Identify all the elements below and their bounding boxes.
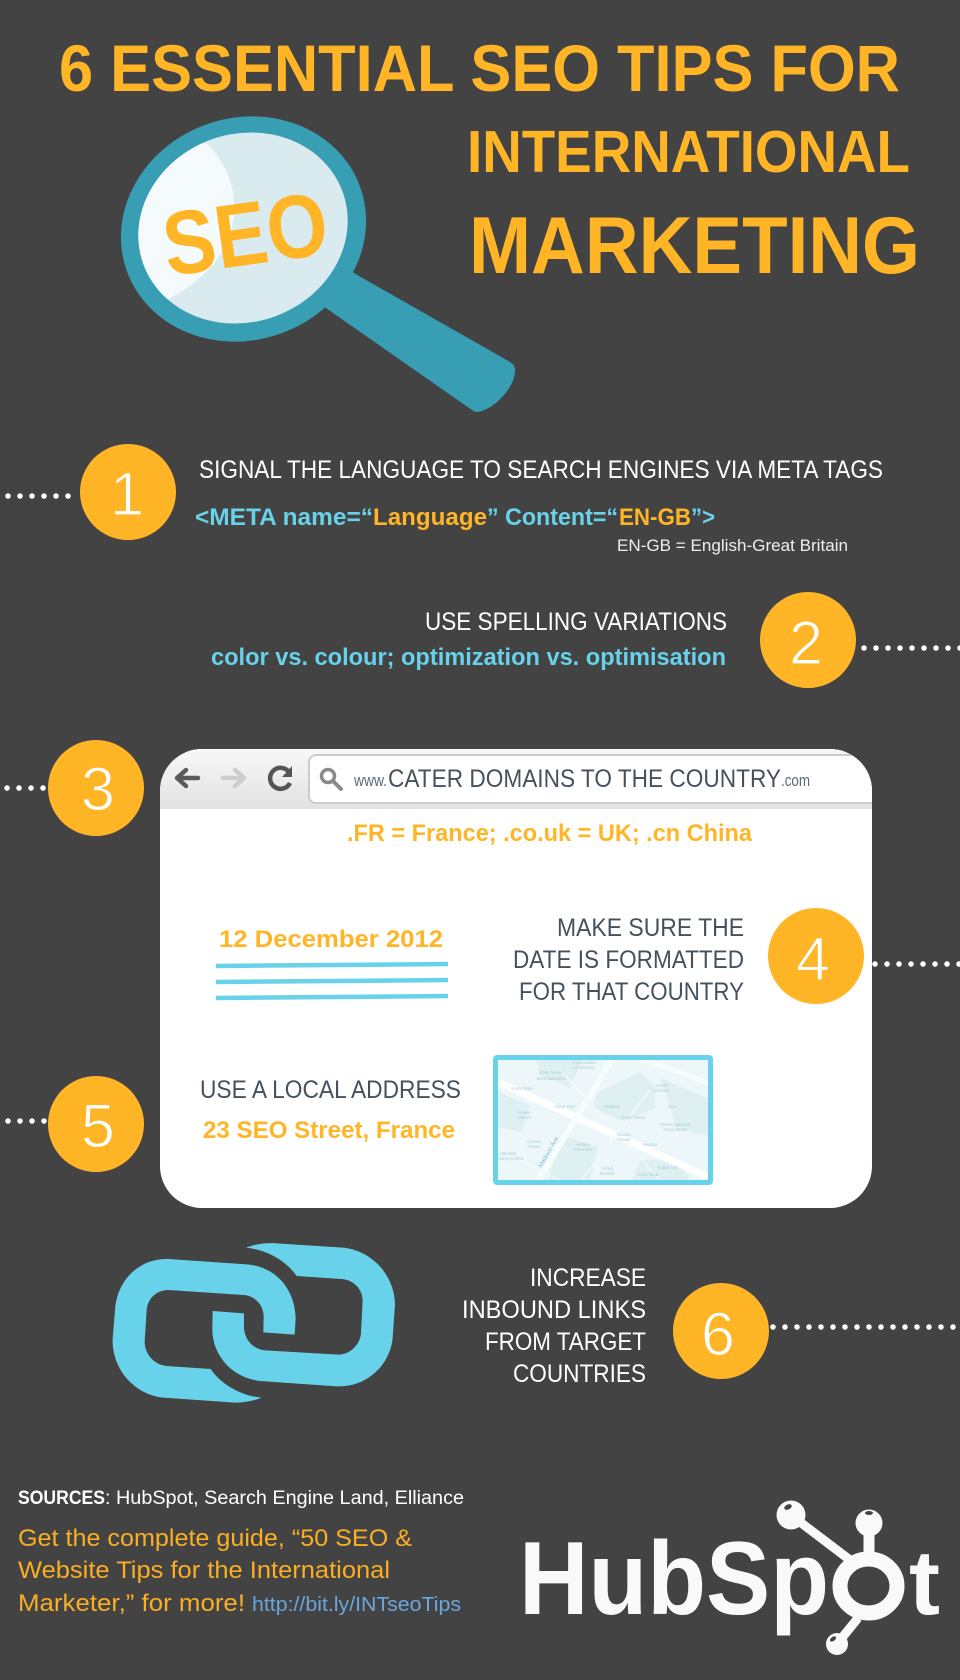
address bar text: CATER DOMAINS TO THE COUNTRY xyxy=(388,765,781,793)
map: Nascar xyxy=(643,1142,658,1147)
HubSpot logo xyxy=(519,1500,940,1655)
map: Core Club xyxy=(638,1172,659,1177)
title: 6 ESSENTIAL SEO TIPS FOR xyxy=(59,31,900,105)
map: Hickey xyxy=(576,1142,591,1147)
tip 2 xyxy=(211,592,960,688)
address bar text: .com xyxy=(781,771,810,790)
call to action: http://bit.ly/INTseoTips xyxy=(252,1594,461,1616)
date text: MAKE SURE THE xyxy=(557,914,744,942)
tip 3 number: 3 xyxy=(81,755,115,823)
icon: magnifying glass with SEO: SEO xyxy=(157,174,334,296)
map: Entertainment xyxy=(537,1076,566,1081)
map: Madison Ave xyxy=(538,1136,561,1169)
tip 6: 6 xyxy=(701,1300,735,1368)
tip 4 number: 4 xyxy=(796,925,830,993)
browser toolbar xyxy=(160,749,909,809)
map: Walking xyxy=(604,1104,621,1109)
address text: 23 SEO Street, France xyxy=(203,1117,455,1144)
tip 5 number xyxy=(8,1076,144,1172)
sources: SOURCES xyxy=(18,1488,105,1509)
address bar text: www. xyxy=(353,771,387,790)
map: Airlines xyxy=(516,1115,532,1120)
tip 4 number xyxy=(768,908,960,1004)
title: MARKETING xyxy=(469,201,920,291)
call to action: Get the complete guide, “50 SEO & xyxy=(18,1525,412,1552)
call to action xyxy=(18,1525,461,1617)
date text: FOR THAT COUNTRY xyxy=(519,978,744,1006)
map: Association xyxy=(663,1127,687,1132)
map: Reade xyxy=(617,1137,631,1142)
map: Alfred xyxy=(601,1166,613,1171)
address text xyxy=(200,1076,461,1144)
address text: USE A LOCAL ADDRESS xyxy=(200,1076,461,1104)
map: Coa xyxy=(668,1104,677,1109)
icon: magnifying glass with SEO xyxy=(120,116,516,412)
tip 1 xyxy=(8,444,883,555)
map: Zone Diet xyxy=(555,1104,576,1109)
HubSpot logo: HubSp xyxy=(519,1521,829,1637)
panel: browser window xyxy=(160,749,909,1208)
map: Friars National xyxy=(660,1122,690,1127)
tip 1: ”> xyxy=(691,504,715,531)
tip 2: 2 xyxy=(789,609,823,677)
tip 5 number: 5 xyxy=(81,1092,115,1160)
map: HSBC Bank xyxy=(621,1115,646,1120)
domain examples: .FR = France; .co.uk = UK; .cn China xyxy=(347,820,753,847)
map: Chef's xyxy=(656,1083,669,1088)
tip 6: FROM TARGET xyxy=(485,1328,646,1356)
map: Caviar xyxy=(527,1139,541,1144)
map: Russe xyxy=(527,1144,541,1149)
tip 2: USE SPELLING VARIATIONS xyxy=(425,608,727,636)
tip 6: COUNTRIES xyxy=(513,1360,646,1388)
icon: chain link xyxy=(113,1243,395,1403)
map: Duane xyxy=(617,1132,631,1137)
tip 1: Language xyxy=(373,504,487,531)
map: Gaming Center xyxy=(492,1156,524,1161)
tip 1: EN-GB = English-Great Britain xyxy=(617,537,848,555)
map: of America xyxy=(573,1065,595,1070)
tip 1: EN-GB xyxy=(619,504,691,531)
tip 6 xyxy=(462,1264,960,1388)
tip 1: ” Content=“ xyxy=(487,504,618,531)
call to action: Marketer,” for more! xyxy=(18,1590,245,1617)
map: Salon Ishi xyxy=(658,1165,678,1170)
tip 6: INBOUND LINKS xyxy=(462,1296,646,1324)
tip 6: INCREASE xyxy=(530,1264,646,1292)
date text xyxy=(513,914,744,1006)
tip 1: <META name=“ xyxy=(195,504,373,531)
HubSpot logo: t xyxy=(909,1532,940,1634)
title: INTERNATIONAL xyxy=(467,119,910,185)
tip 1: 1 xyxy=(110,460,144,528)
map xyxy=(492,1057,711,1183)
call to action: Website Tips for the International xyxy=(18,1557,390,1584)
tip 1: SIGNAL THE LANGUAGE TO SEARCH ENGINES VIA META TAGS xyxy=(199,456,883,484)
map: Dunhill xyxy=(600,1171,614,1176)
map: Freeman xyxy=(574,1147,593,1152)
map: Sony Music xyxy=(539,1070,564,1075)
map: Kitchen xyxy=(654,1088,670,1093)
map: Ultimate xyxy=(500,1151,517,1156)
tip 2: color vs. colour; optimization vs. optimisation xyxy=(211,644,726,671)
map: Asana xyxy=(517,1110,531,1115)
date example: 12 December 2012 xyxy=(219,926,443,953)
date text: DATE IS FORMATTED xyxy=(513,946,744,974)
tip 3 number xyxy=(7,740,144,836)
sources: : HubSpot, Search Engine Land, Elliance xyxy=(105,1488,464,1509)
map: Sony Style xyxy=(511,1086,533,1091)
map: Corporation xyxy=(572,1060,596,1065)
title xyxy=(59,31,920,291)
